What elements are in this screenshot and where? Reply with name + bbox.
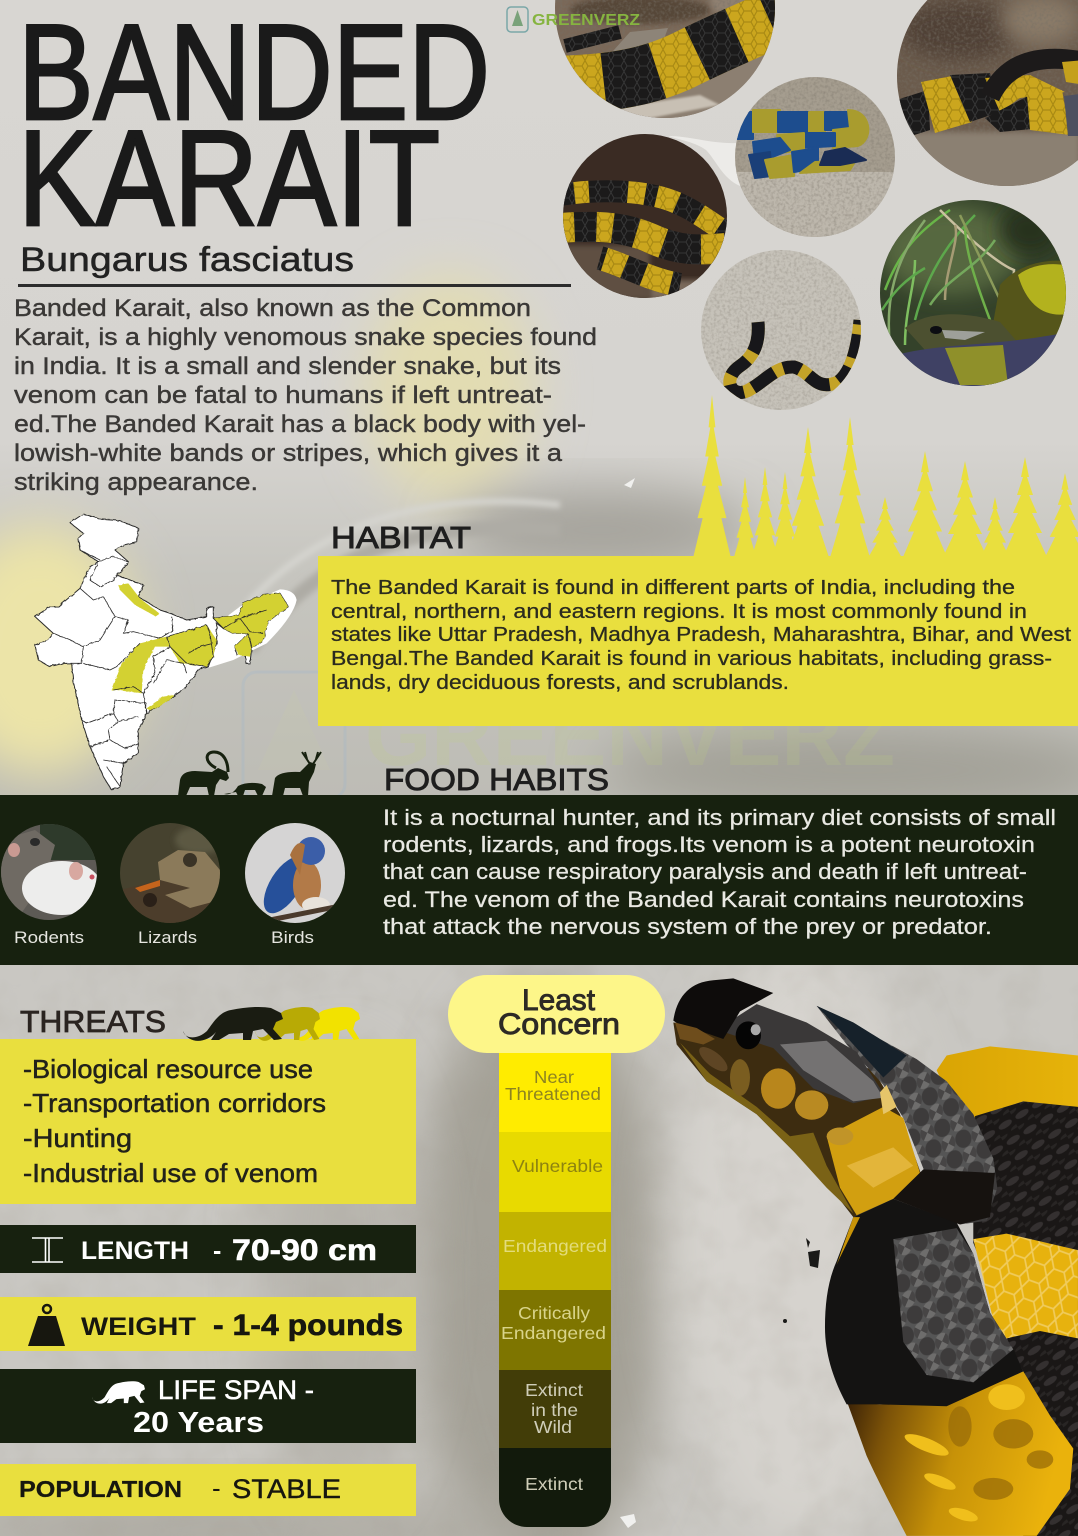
threats heading: THREATS: [20, 1004, 166, 1039]
stat: population: POPULATION: [19, 1476, 182, 1502]
prey: birds: [245, 823, 345, 947]
stat: weight: WEIGHT: [81, 1313, 196, 1341]
food habits heading: FOOD HABITS: [384, 762, 609, 797]
icon: white cat: [92, 1381, 145, 1404]
trees: [693, 395, 1078, 557]
icon: three walking cats: [183, 1007, 360, 1041]
front yellow band: [847, 1371, 1073, 1536]
status labels: Wild: [534, 1417, 572, 1437]
prey: lizards: [120, 823, 225, 947]
title rule: [18, 284, 571, 287]
icon: deer: [272, 752, 321, 796]
snout: [673, 978, 773, 1039]
status labels: Extinct: [525, 1474, 583, 1494]
status labels: Threatened: [505, 1084, 601, 1104]
dark underlay: [973, 1107, 1078, 1536]
large watermark: GREENVERZ: [365, 688, 895, 784]
icon: small cat: [224, 783, 266, 796]
white blotch: [668, 136, 740, 186]
photo: snake top right: [890, 0, 1078, 192]
intro paragraph: Karait, is a highly venomous snake species found: [14, 324, 597, 351]
intro paragraph: [14, 295, 597, 496]
photo: snake top centre: [555, 0, 775, 118]
panel: habitat: Bengal.The Banded Karait is found in various habitats, including grass-: [331, 647, 1052, 670]
head plates: [717, 1004, 885, 1103]
panel: habitat: [318, 556, 1078, 726]
small white blots: [620, 478, 636, 1528]
food habits text: that can cause respiratory paralysis and death if left untreat-: [383, 859, 1027, 884]
back yellow loop: [937, 1046, 1078, 1118]
top small watermark logo: GREENVERZ: [532, 12, 640, 29]
food habits text: that attack the nervous system of the prey or predator.: [383, 914, 992, 939]
photo: blue-banded snake: [735, 77, 895, 237]
status labels: Endangered: [501, 1323, 606, 1343]
conservation status scale: [448, 975, 665, 1528]
panel: threats: -Transportation corridors: [23, 1088, 326, 1118]
status labels: Near: [534, 1067, 574, 1087]
stat: population: -: [212, 1473, 221, 1503]
status labels: Extinct: [525, 1380, 583, 1400]
stat: life span: [0, 1369, 416, 1443]
large watermark: [243, 672, 895, 798]
title: [18, 0, 490, 254]
panel: threats: -Hunting: [23, 1123, 132, 1153]
status labels: Vulnerable: [512, 1156, 603, 1176]
photo: grass snake: [880, 200, 1066, 386]
status labels: Critically: [518, 1303, 590, 1323]
panel: threats: [0, 1039, 416, 1204]
stat: length: LENGTH: [81, 1237, 189, 1265]
prey: rodents: Rodents: [14, 928, 84, 947]
habitat heading: HABITAT: [331, 520, 471, 555]
title: BANDED: [18, 0, 490, 148]
intro paragraph: ed.The Banded Karait has a black body with yel-: [14, 411, 586, 438]
food habits text: rodents, lizards, and frogs.Its venom is a potent neurotoxin: [383, 832, 1035, 857]
icon: length: [32, 1238, 63, 1262]
prey: rodents: [1, 824, 97, 943]
current status: least concern: [448, 975, 665, 1053]
neck and jaw: [673, 1022, 923, 1217]
stat: population: [0, 1464, 416, 1516]
title: KARAIT: [18, 102, 440, 254]
stat: length: [0, 1225, 416, 1273]
animal silhouettes: [178, 752, 321, 796]
intro paragraph: striking appearance.: [14, 469, 258, 496]
photo: coiled snake left: [560, 130, 730, 300]
food habits text: It is a nocturnal hunter, and its primary diet consists of small: [383, 805, 1056, 830]
stat: weight: [0, 1297, 416, 1351]
status labels: Endangered: [503, 1236, 607, 1256]
intro paragraph: Banded Karait, also known as the Common: [14, 295, 531, 322]
prey: birds: Birds: [271, 928, 314, 947]
stat: length: -: [213, 1237, 221, 1265]
subtitle: Bungarus fasciatus: [20, 241, 354, 279]
panel: threats: -Industrial use of venom: [23, 1158, 318, 1188]
panel: food habits: [0, 795, 1078, 965]
map of India with range: [35, 514, 297, 790]
icon: ibex: [178, 752, 229, 796]
front black body: [825, 1199, 1023, 1406]
dark neck scales: [817, 1006, 997, 1224]
icon: weight: [28, 1305, 65, 1346]
status bands: [499, 1052, 611, 1528]
back black band: [973, 1101, 1078, 1254]
stat: population: STABLE: [232, 1474, 341, 1504]
panel: habitat: lands, dry deciduous forests, and scrublands.: [331, 671, 789, 694]
panel: habitat: The Banded Karait is found in different parts of India, including the: [331, 576, 1015, 599]
food habits text: ed. The venom of the Banded Karait contains neurotoxins: [383, 887, 1024, 912]
prey: lizards: Lizards: [138, 928, 197, 947]
illustration: banded karait: [673, 978, 1078, 1536]
stat: life span: 20 Years: [133, 1407, 264, 1439]
current status: least concern: Concern: [498, 1008, 620, 1041]
specks near body: [783, 1238, 820, 1323]
stat: life span: LIFE SPAN -: [158, 1375, 314, 1405]
intro paragraph: venom can be fatal to humans if left untreat-: [14, 382, 552, 409]
intro paragraph: lowish-white bands or stripes, which gives it a: [14, 440, 563, 467]
panel: habitat: states like Uttar Pradesh, Madhya Pradesh, Maharashtra, Bihar, and West: [331, 623, 1071, 646]
photo: sand snake: [701, 250, 861, 410]
intro paragraph: in India. It is a small and slender snake, but its: [14, 353, 561, 380]
status labels: [501, 1067, 607, 1494]
stat: length: 70-90 cm: [232, 1234, 377, 1267]
back yellow band: [973, 1234, 1078, 1338]
lower right black band: [1007, 1331, 1078, 1536]
panel: threats: -Biological resource use: [23, 1054, 313, 1084]
panel: habitat: central, northern, and eastern regions. It is most commonly found in: [331, 600, 1027, 623]
top small watermark logo: [507, 7, 640, 32]
current status: least concern: Least: [522, 984, 596, 1017]
eye: [736, 1021, 761, 1049]
status labels: in the: [531, 1400, 578, 1420]
stat: weight: - 1-4 pounds: [213, 1309, 403, 1342]
food habits text: [383, 805, 1056, 939]
